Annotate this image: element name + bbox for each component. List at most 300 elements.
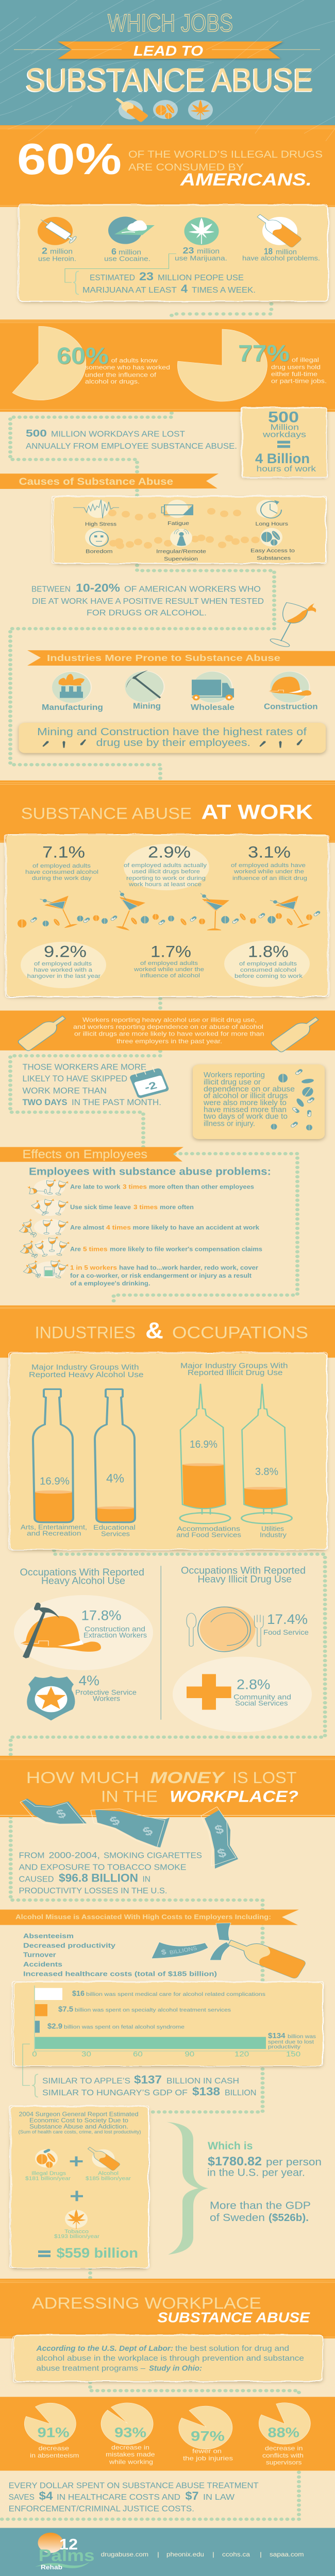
big stat 60%: 60% xyxy=(17,135,122,184)
axis labels xyxy=(32,2050,300,2058)
stat: 1.7 percent xyxy=(133,942,204,979)
cause: high stress xyxy=(73,500,119,527)
martini 1 xyxy=(40,896,77,928)
statement text: OF THE WORLD’S ILLEGAL DRUGS xyxy=(128,148,323,160)
stat: 2.9 percent: 2.9% xyxy=(148,843,191,861)
icon: bottle and billions note xyxy=(152,1923,307,1979)
text: cost per person xyxy=(207,2140,322,2223)
icon: alcohol bottle xyxy=(254,211,302,248)
industry: construction xyxy=(264,671,317,711)
footer xyxy=(0,2528,335,2576)
text: three employers in the past year. xyxy=(116,1038,222,1045)
pie: 91 percent: 91% xyxy=(37,2425,70,2441)
text: skipped work: WORK MORE THAN xyxy=(23,1086,107,1096)
icon: nails xyxy=(42,739,303,748)
stat: alcohol: million xyxy=(276,248,297,256)
text: smoking losses xyxy=(19,1851,202,1895)
bottle chart: arts: 16.9% xyxy=(40,1475,70,1487)
icon: bottle xyxy=(113,95,148,123)
logo: 12 palms rehab: 12 xyxy=(59,2536,78,2553)
bill 2: $ xyxy=(107,1813,123,1828)
comparison text: BILLION IN CASH xyxy=(166,2076,239,2085)
source links: sapaa.com xyxy=(270,2551,304,2558)
text: every dollar: EVERY DOLLAR SPENT ON SUBSTANCE ABUSE TREATMENT xyxy=(9,2481,259,2490)
heading: SUBSTANCE ABUSE xyxy=(21,804,192,823)
heading: OCCUPATIONS xyxy=(172,1323,308,1342)
orange band: ohio study results xyxy=(0,2397,335,2471)
cause: long hours xyxy=(256,500,288,527)
axis labels: 120 xyxy=(234,2050,249,2058)
text: cost per person: per person xyxy=(266,2156,322,2168)
text: skipped work: THOSE WORKERS ARE MORE xyxy=(23,1062,146,1072)
callout: mining and construction: Mining and Construction have the highest rates of xyxy=(37,725,307,738)
callout: weekly marijuana use: MARIJUANA AT LEAST xyxy=(82,285,177,295)
stat: 1.7 percent: worked while under the xyxy=(133,966,204,973)
pie: 91 percent xyxy=(24,2403,79,2459)
stat: alcohol xyxy=(242,246,320,262)
pie: 93 percent xyxy=(101,2403,155,2465)
source links xyxy=(101,2551,304,2558)
occupation: community and social services: Social Services xyxy=(235,1700,288,1707)
stat: alcohol: have alcohol problems. xyxy=(242,255,320,262)
item: tobacco: $193 billion/year xyxy=(54,2233,99,2240)
bar label: 134 billion: billion was xyxy=(288,2033,316,2040)
bars xyxy=(35,1988,266,2049)
text: smoking losses: CAUSED xyxy=(19,1874,54,1884)
industry: wholesale: Wholesale xyxy=(191,703,234,712)
heading: employees with problems: Employees with substance abuse problems: xyxy=(29,1165,271,1177)
comparison text: $138 xyxy=(192,2086,220,2098)
header sketch lines xyxy=(0,0,335,141)
panel: 500 million workdays: Million xyxy=(270,422,299,432)
heading: occupations illicit drugs: Heavy Illicit Drug Use xyxy=(198,1573,292,1585)
text: smoking losses: IN xyxy=(142,1874,150,1884)
text: smoking losses: $96.8 BILLION xyxy=(59,1872,138,1885)
effect row 4: Are xyxy=(70,1246,81,1252)
text: workers who die at work: FOR DRUGS OR ALCOHOL. xyxy=(87,608,207,617)
bottle chart: arts xyxy=(33,1389,74,1523)
panel: healthcare costs bar chart xyxy=(12,1981,323,2066)
icon: scattered pills xyxy=(271,1069,315,1130)
effect row 2: Use sick time leave xyxy=(70,1204,131,1211)
text: every dollar: IN HEALTHCARE COSTS AND xyxy=(57,2493,180,2501)
item: alcohol: $185 billion/year xyxy=(86,2175,131,2181)
syringe chart: utilities: 3.8% xyxy=(255,1465,278,1477)
callout: mining and construction xyxy=(19,723,326,753)
stat: 77 percent of illegal drug users: or part-time jobs. xyxy=(271,378,327,384)
pie: 88 percent: conflicts with xyxy=(262,2452,304,2459)
pie: 97 percent: 97% xyxy=(191,2429,225,2444)
icon: plate and cutlery xyxy=(187,1606,263,1652)
list: alcohol costs: Increased healthcare costs (total of $185 billion) xyxy=(23,1970,217,1978)
orange band: substance abuse at work xyxy=(0,781,335,843)
stat: heroin xyxy=(38,246,76,263)
text: workers who die at work: DIE AT WORK HAVE A POSITIVE RESULT WHEN TESTED xyxy=(32,597,264,605)
bar label: 134 billion xyxy=(268,2032,316,2050)
martini 3 xyxy=(200,893,229,930)
panel text: Substance Abuse and Addiction. xyxy=(29,2123,128,2130)
text: smoking losses: FROM xyxy=(19,1851,44,1860)
stat: 7.1 percent: 7.1% xyxy=(42,843,85,861)
heading: IN THE xyxy=(101,1787,158,1805)
text: workers who die at work: OF AMERICAN WORKERS WHO xyxy=(124,584,261,594)
pie chart 60% xyxy=(12,326,86,400)
occupation: protective service: 4% xyxy=(79,1673,99,1688)
text: workdays lost xyxy=(26,428,237,450)
ribbon: causes of substance abuse: Causes of Substance Abuse xyxy=(19,476,173,487)
icon: cocaine xyxy=(108,217,155,244)
pie: 93 percent: 93% xyxy=(114,2425,146,2441)
text: every dollar: $7 xyxy=(186,2489,199,2502)
stat: 77 percent of illegal drug users xyxy=(238,340,327,384)
pie: 88 percent: supervisors xyxy=(266,2459,302,2466)
connector bracket xyxy=(65,254,176,294)
text: or illicit drugs are more likely to have worked for more than xyxy=(74,1030,264,1037)
stat: 60 percent of adults: under the influence of xyxy=(85,371,156,378)
text: every dollar xyxy=(9,2481,259,2513)
bottle and syringe labels: Industry xyxy=(260,1532,287,1539)
bottle chart: educational services: 4% xyxy=(106,1471,124,1485)
orange band: how much money xyxy=(0,1756,335,1817)
ribbon: effects on employees: Effects on Employees xyxy=(23,1147,147,1161)
effect row 1: more often than other employees xyxy=(149,1183,254,1190)
text: cost per person: in the U.S. per year. xyxy=(207,2166,305,2178)
heading: & xyxy=(145,1317,163,1343)
effect row 1: Are late to work xyxy=(70,1183,121,1190)
effect row 2 xyxy=(30,1198,194,1216)
heading: occupations illicit drugs xyxy=(181,1565,306,1585)
comparison text xyxy=(42,2073,256,2098)
text: smoking losses: SMOKING CIGARETTES xyxy=(104,1851,202,1860)
effect row 1 xyxy=(27,1179,254,1196)
stat: 7.1 percent: of employed adults xyxy=(32,862,91,869)
pie: 93 percent: decrease in xyxy=(111,2444,149,2451)
statement text: AMERICANS. xyxy=(180,170,312,190)
panel: at work stats xyxy=(5,834,329,997)
icon: police badge xyxy=(27,1676,75,1721)
icon: plus xyxy=(71,2191,83,2201)
text: every dollar: ENFORCEMENT/CRIMINAL JUSTICE COSTS. xyxy=(9,2504,194,2513)
panel: drug users xyxy=(18,205,328,301)
callout: missed work: dependence on or abuse xyxy=(204,1085,295,1093)
pie: 91 percent: in absenteeism xyxy=(30,2452,79,2459)
bar label: 16 billion: $16 xyxy=(72,1990,85,1998)
effect row 2: more often xyxy=(160,1204,194,1211)
ribbon: alcohol misuse: Alcohol Misuse is Associated With High Costs to Employers Including: xyxy=(15,1913,271,1921)
cause: irregular supervision: Supervision xyxy=(164,555,198,562)
text: cost per person: Which is xyxy=(208,2140,253,2152)
item: illegal drugs: $181 billion/year xyxy=(25,2175,71,2181)
stat: 9.2 percent: hangover in the last year xyxy=(27,973,101,979)
text xyxy=(73,1016,264,1045)
syringe chart: accommodations: 16.9% xyxy=(190,1438,217,1450)
ribbon: causes of substance abuse xyxy=(0,473,219,489)
heading: drug groups: Major Industry Groups With xyxy=(180,1362,288,1370)
ribbon: industries: Industries More Prone to Substance Abuse xyxy=(47,653,280,663)
stat: 2.9 percent xyxy=(124,843,209,890)
pie chart 77% xyxy=(177,329,267,401)
list: alcohol costs: Decreased productivity xyxy=(23,1942,116,1950)
industry: manufacturing: Manufacturing xyxy=(42,703,103,712)
ribbon: industries xyxy=(27,650,335,666)
effect row 5 xyxy=(22,1260,258,1287)
statement text xyxy=(128,148,323,190)
list: alcohol costs: Accidents xyxy=(23,1960,62,1968)
panel: 500 million workdays: 500 xyxy=(268,409,299,426)
callout: missed work: Workers reporting xyxy=(204,1071,265,1079)
pie: 97 percent xyxy=(179,2406,233,2462)
martini 4 xyxy=(270,896,309,928)
text: workers who die at work: BETWEEN xyxy=(31,584,71,594)
bill 2: $ xyxy=(140,1824,156,1839)
stat: 3.1 percent xyxy=(231,843,307,882)
callout: mining and construction: drug use by their employees. xyxy=(96,736,250,748)
axes xyxy=(35,1986,293,2051)
bottle and syringe labels: and Food Services xyxy=(176,1532,241,1539)
effect row 3: 4 times xyxy=(106,1224,131,1231)
stat: 1.8 percent: consumed alcohol xyxy=(240,967,296,973)
bar label: 134 billion: spent due to lost xyxy=(268,2039,314,2045)
effect row 3: more likely to have an accident at work xyxy=(133,1224,260,1231)
panel: dept of labor xyxy=(12,2335,323,2382)
pie: 93 percent: while working xyxy=(109,2459,153,2465)
icon: cross xyxy=(187,1674,231,1710)
text: smoking losses: 2000-2004, xyxy=(48,1851,100,1860)
bottle and syringe labels: Educational xyxy=(93,1524,136,1532)
stat: 9.2 percent: 9.2% xyxy=(44,942,87,961)
stat: cocaine: million xyxy=(119,249,141,257)
heading: IS LOST xyxy=(232,1769,296,1787)
cause: irregular supervision xyxy=(156,529,206,562)
axis labels: 60 xyxy=(133,2050,143,2058)
cause: easy access: Substances xyxy=(257,555,291,561)
big curly brace xyxy=(166,2122,208,2255)
list: alcohol costs: Turnover xyxy=(23,1951,56,1959)
stat: 7.1 percent xyxy=(25,843,98,882)
panel: dept of labor: alcohol abuse in the workplace is through prevention and substance xyxy=(36,2354,304,2363)
heading: HOW MUCH xyxy=(26,1769,139,1787)
icon: wine glass xyxy=(269,603,316,648)
item: tobacco: Tobacco xyxy=(64,2228,89,2234)
heading: INDUSTRIES xyxy=(35,1323,136,1342)
icon: marijuana xyxy=(185,217,219,245)
item: alcohol: Alcohol xyxy=(98,2170,119,2176)
stat: 77 percent of illegal drug users: 77% xyxy=(238,340,290,366)
panel text xyxy=(19,2111,141,2135)
item: alcohol xyxy=(85,2145,131,2181)
orange band: pies xyxy=(0,319,335,412)
panel: dept of labor: abuse treatment programs – xyxy=(36,2364,146,2372)
comparison text: SIMILAR TO HUNGARY’S GDP OF xyxy=(42,2088,188,2097)
heading: occupations illicit drugs: Occupations With Reported xyxy=(181,1565,306,1576)
heading: occupations heavy alcohol: Heavy Alcohol Use xyxy=(41,1575,125,1586)
pie: 91 percent: decrease xyxy=(39,2445,69,2452)
pie: 97 percent: fewer on xyxy=(192,2448,222,2454)
ribbon: alcohol misuse xyxy=(0,1910,299,1925)
axis labels: 90 xyxy=(185,2050,194,2058)
bar label: 2.9 billion: $2.9 xyxy=(47,2022,62,2030)
text: workdays lost: 500 xyxy=(26,428,47,439)
icon: calendar: -2 xyxy=(142,1079,159,1093)
heading xyxy=(32,2294,310,2326)
occupation: food service: Food Service xyxy=(263,1629,309,1636)
panel: 500 million workdays: workdays xyxy=(262,430,306,439)
panel: causes xyxy=(52,496,326,564)
panel: industry groups xyxy=(9,1352,327,1550)
bottle and syringe labels: Services xyxy=(101,1531,130,1538)
bill 2 xyxy=(91,1809,170,1848)
occupation: construction workers: Extraction Workers xyxy=(83,1632,147,1639)
bottle and syringe labels: Arts, Entertainment, xyxy=(21,1524,87,1531)
bottle and syringe labels xyxy=(21,1524,287,1539)
bar label: 134 billion: $134 xyxy=(268,2032,285,2040)
bill 3: $ xyxy=(215,1845,228,1860)
text: every dollar: SAVES xyxy=(9,2493,35,2501)
bottle chart: educational services xyxy=(95,1389,136,1523)
comparison text: SIMILAR TO APPLE’S xyxy=(42,2076,130,2085)
cause: irregular supervision: Irregular/Remote xyxy=(156,548,206,554)
pie: 97 percent: the job injuries xyxy=(183,2455,233,2462)
stat: 77 percent of illegal drug users: either full-time xyxy=(271,370,317,378)
logo: 12 palms rehab: Palms xyxy=(39,2546,95,2565)
ribbon: lead to: LEAD TO xyxy=(133,42,203,59)
bill 1 xyxy=(20,1799,87,1825)
text: smoking losses: AND EXPOSURE TO TOBACCO SMOKE xyxy=(19,1862,186,1872)
panel text: Economic Cost to Society Due to xyxy=(29,2117,128,2124)
source links: ccohs.ca xyxy=(222,2551,250,2558)
text: skipped work: IN THE PAST MONTH. xyxy=(72,1098,161,1107)
text: workdays lost: MILLION WORKDAYS ARE LOST xyxy=(51,429,185,438)
heading xyxy=(26,1769,298,1805)
icon: bottle left xyxy=(17,1012,70,1052)
icon: falling money xyxy=(20,1799,238,1869)
bar label: 16 billion: billion was spent medical care for alcohol related complications xyxy=(86,1991,265,1997)
callout: weekly marijuana use: 23 xyxy=(139,270,154,283)
callout: weekly marijuana use: ESTIMATED xyxy=(90,273,135,282)
icon: syringe xyxy=(38,216,77,245)
total: 559 billion: $559 billion xyxy=(57,2246,138,2261)
text: smoking losses: PRODUCTIVITY LOSSES IN THE U.S. xyxy=(19,1886,167,1895)
stat: 7.1 percent: have consumed alcohol xyxy=(25,869,98,875)
icon: pills xyxy=(153,100,178,119)
callout: missed work: have missed more than xyxy=(204,1106,287,1114)
bar label: 134 billion: productivity xyxy=(268,2043,300,2050)
stat: 1.8 percent xyxy=(224,940,310,987)
stat: 1.7 percent: of employed adults xyxy=(140,960,198,967)
callout: missed work: illness or injury. xyxy=(204,1120,255,1128)
heading: ADRESSING WORKPLACE xyxy=(32,2294,261,2312)
icon: plus xyxy=(70,2156,82,2166)
stat: heroin: use Heroin. xyxy=(38,256,76,263)
text: skipped work: TWO DAYS xyxy=(23,1098,67,1107)
stat: heroin: million xyxy=(50,248,73,256)
text: cost per person: of Sweden xyxy=(210,2211,265,2223)
effect row 4 xyxy=(19,1236,262,1259)
stat: 9.2 percent xyxy=(21,942,106,988)
source links: | xyxy=(260,2551,262,2558)
decorative pill trail xyxy=(108,508,260,549)
cause: fatigue xyxy=(162,500,193,527)
panel: dept of labor: the best solution for drug and xyxy=(175,2345,289,2352)
heading: occupations heavy alcohol: Occupations With Reported xyxy=(20,1566,144,1578)
occupation: food service: 17.4% xyxy=(267,1612,308,1627)
stat: alcohol: 18 xyxy=(264,246,273,257)
text: and workers reporting dependence on or abuse of alcohol xyxy=(73,1023,263,1030)
header panel xyxy=(0,0,335,125)
stat: 9.2 percent: have worked with a xyxy=(34,967,93,973)
bill 1: $ xyxy=(54,1806,69,1821)
heading: occupations heavy alcohol xyxy=(20,1566,144,1586)
comparison text: BILLION xyxy=(225,2088,256,2097)
callout: missed work: illicit drug use or xyxy=(204,1078,261,1086)
martini 2 xyxy=(116,891,145,930)
text: cost per person: More than the GDP xyxy=(210,2199,311,2211)
bar label: 2.9 billion: billion was spent on fetal alcohol syndrome xyxy=(64,2024,185,2030)
text: every dollar: $4 xyxy=(39,2489,53,2502)
effect row 4: more likely to file worker's compensation claims xyxy=(110,1246,262,1252)
stat: cocaine: 6 xyxy=(111,247,116,257)
panel: dept of labor: According to the U.S. Dept of Labor: xyxy=(36,2345,173,2352)
source links: | xyxy=(157,2551,159,2558)
cause: boredom xyxy=(85,528,113,554)
icon: cannabis leaf xyxy=(188,100,213,120)
stat: 3.1 percent: of employed adults have xyxy=(231,862,306,869)
heading: SUBSTANCE ABUSE xyxy=(158,2309,310,2326)
orange band: industries and occupations xyxy=(0,1306,335,1358)
icon: bottle right xyxy=(270,1013,323,1053)
callout: missed work: of alcohol or illicit drugs xyxy=(204,1092,288,1100)
text: skipped work: LIKELY TO HAVE SKIPPED xyxy=(23,1074,127,1084)
industry: mining: Mining xyxy=(133,701,161,710)
heading: drug groups xyxy=(180,1362,288,1377)
effect row 3: Are almost xyxy=(70,1224,105,1231)
callout: missed work xyxy=(193,1064,325,1139)
occupation: protective service: Protective Service xyxy=(75,1689,137,1697)
industry: construction: Construction xyxy=(264,702,317,711)
cause: long hours: Long Hours xyxy=(256,520,288,527)
stat: 1.7 percent: 1.7% xyxy=(150,942,191,961)
logo: 12 palms rehab xyxy=(35,2533,95,2571)
icon: calendar xyxy=(128,1065,170,1099)
pie: 93 percent: mistakes made xyxy=(106,2451,155,2458)
title line: which jobs: WHICH JOBS xyxy=(108,9,233,37)
stat: 2.9 percent: reporting to work or during xyxy=(126,875,206,882)
callout: weekly marijuana use: TIMES A WEEK. xyxy=(192,285,256,295)
occupation: construction workers xyxy=(14,1595,153,1670)
stat: 1.8 percent: before coming to work xyxy=(234,973,303,979)
heading: alcohol groups: Reported Heavy Alcohol Use xyxy=(29,1371,144,1379)
text: cost per person: $1780.82 xyxy=(208,2154,262,2168)
occupation: community and social services: 2.8% xyxy=(237,1677,270,1692)
occupation: protective service xyxy=(27,1673,137,1721)
panel text: 2004 Surgeon General Report Estimated xyxy=(19,2111,139,2117)
axis labels: 0 xyxy=(32,2050,37,2058)
comparison text: $137 xyxy=(134,2073,162,2086)
pie: 88 percent: 88% xyxy=(267,2425,299,2441)
icon: helmet and hammer xyxy=(21,1603,101,1658)
effect row 5: of a employee's drinking. xyxy=(70,1280,150,1287)
stat: 60 percent of adults xyxy=(57,343,170,385)
stat: 77 percent of illegal drug users: drug users hold xyxy=(271,364,321,370)
industry: manufacturing xyxy=(42,671,103,712)
effect row 5: have had to...work harder, redo work, cover xyxy=(119,1264,258,1271)
bar label: 7.5 billion: $7.5 xyxy=(58,2005,73,2013)
stat: marijuana: million xyxy=(197,247,220,255)
occupation: construction workers: 17.8% xyxy=(81,1608,121,1623)
source links: pheonix.edu xyxy=(166,2551,204,2558)
axis labels: 30 xyxy=(81,2050,91,2058)
panel: 500 million workdays: 4 Billion xyxy=(255,451,310,466)
